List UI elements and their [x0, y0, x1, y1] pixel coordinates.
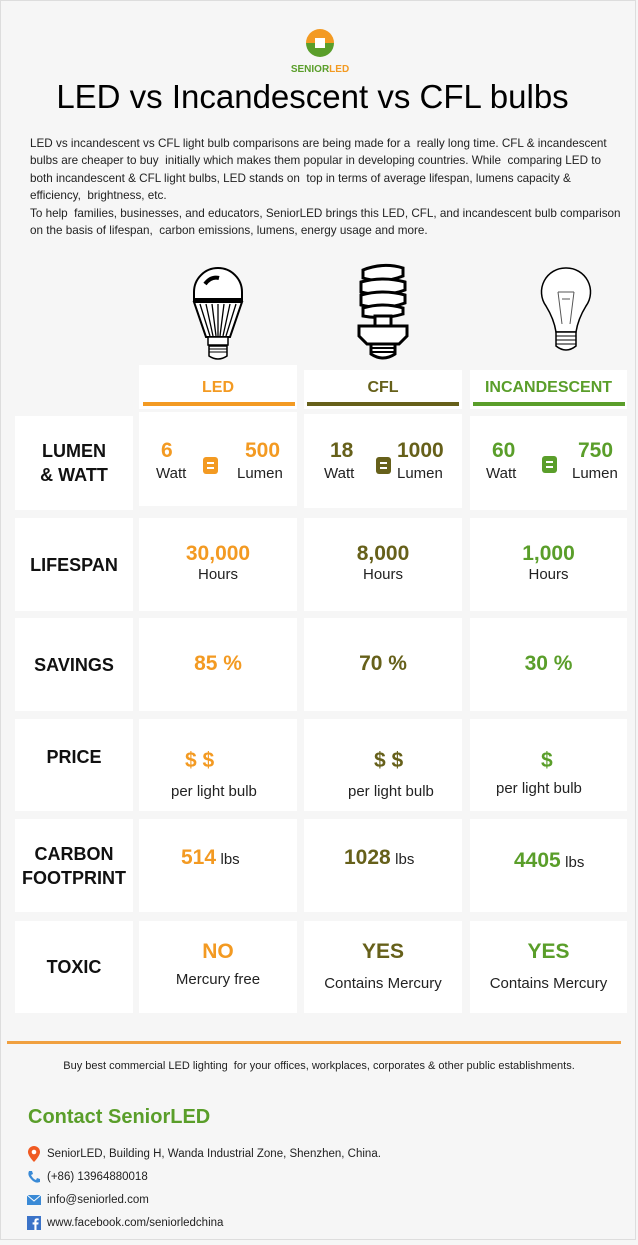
- header: LED: [139, 365, 297, 409]
- row: toxic: Contains Mercury: [324, 975, 442, 992]
- intro text: [30, 137, 621, 237]
- icon: location: SeniorLED, Building H, Wanda Industrial Zone, Shenzhen, China.: [47, 1148, 381, 1160]
- CFL lumen cell: Watt: [324, 465, 354, 482]
- icon: email: info@seniorled.com: [47, 1194, 149, 1206]
- intro text: LED vs incandescent vs CFL light bulb comparisons are being made for a really long time. CFL & incandescent bulbs are cheaper to buy initially which makes them popular in developing countries. While comparing LED to both incandescent & CFL light bulbs, LED stands on top in terms of average lifespan, lumens capacity & efficiency, brightness, etc.: [30, 137, 607, 202]
- row: lifespan: 30,000: [186, 542, 250, 565]
- row: lifespan: Hours: [198, 566, 238, 583]
- INC lumen cell: 60: [492, 439, 515, 462]
- INC lumen cell: Watt: [486, 465, 516, 482]
- LED lumen cell: [139, 412, 297, 506]
- title: LED vs Incandescent vs CFL bulbs: [56, 78, 569, 115]
- header: LED: LED: [202, 379, 234, 396]
- row: lifespan: 1,000: [522, 542, 575, 565]
- row: savings: 85 %: [194, 652, 242, 675]
- label: lumen & watt: & WATT: [40, 465, 108, 485]
- icon: LED bulb: [192, 267, 244, 360]
- LED lumen cell: 500: [245, 439, 280, 462]
- header: CFL: CFL: [367, 379, 399, 396]
- INC lumen cell: Lumen: [572, 465, 618, 482]
- LED lumen cell: 6: [161, 439, 173, 462]
- CFL lumen cell: 18: [330, 439, 353, 462]
- logo: [291, 29, 349, 75]
- row: lifespan: 8,000: [357, 542, 409, 565]
- row: carbon footprint: 4405 lbs: [514, 849, 584, 872]
- row: carbon footprint: [15, 819, 627, 912]
- tagline: Buy best commercial LED lighting for your offices, workplaces, corporates & other public establishments.: [63, 1060, 575, 1072]
- INC lumen cell: [470, 416, 627, 510]
- row: savings: SAVINGS: [34, 654, 114, 674]
- icon: CFL bulb: [358, 264, 408, 360]
- row: carbon footprint: FOOTPRINT: [22, 868, 126, 888]
- row: lifespan: [15, 518, 627, 611]
- CFL lumen cell: Lumen: [397, 465, 443, 482]
- row: lifespan: Hours: [363, 566, 403, 583]
- CFL lumen cell: [304, 414, 462, 508]
- row: savings: [15, 618, 627, 711]
- row: toxic: [15, 921, 627, 1013]
- header: CFL: [304, 370, 462, 409]
- row: price: per light bulb: [171, 783, 257, 800]
- icon: incandescent bulb: [540, 267, 592, 351]
- row: price: per light bulb: [496, 780, 582, 797]
- row: toxic: Mercury free: [176, 971, 260, 988]
- row: toxic: Contains Mercury: [490, 975, 607, 992]
- row: lifespan: Hours: [528, 566, 568, 583]
- CFL lumen cell: 1000: [397, 439, 444, 462]
- orange divider line: [7, 1041, 621, 1044]
- row: carbon footprint: 514 lbs: [181, 846, 240, 869]
- row: price: $ $: [185, 749, 214, 772]
- row: carbon footprint: CARBON: [34, 844, 114, 864]
- row: price: [15, 719, 627, 811]
- icon: phone: (+86) 13964880018: [47, 1170, 148, 1182]
- row: lumen & watt: [15, 412, 627, 510]
- label: lumen & watt: LUMEN: [42, 441, 106, 461]
- logo: SENIORLED: [291, 64, 349, 75]
- row: toxic: NO: [202, 940, 234, 963]
- row: carbon footprint: 1028 lbs: [344, 846, 414, 869]
- label: lumen & watt: [15, 416, 133, 510]
- row: price: $: [541, 749, 553, 772]
- row: toxic: TOXIC: [47, 957, 101, 977]
- row: savings: 70 %: [359, 652, 407, 675]
- row: savings: 30 %: [525, 652, 572, 675]
- contact heading: Contact SeniorLED: [28, 1106, 210, 1128]
- header: INCANDESCENT: INCANDESCENT: [485, 379, 612, 396]
- row: lifespan: LIFESPAN: [30, 554, 118, 574]
- header: INCANDESCENT: [470, 370, 627, 409]
- intro text: To help families, businesses, and educators, SeniorLED brings this LED, CFL, and incandescent bulb comparison on the basis of lifespan, carbon emissions, lumens, energy usage and more.: [30, 207, 621, 237]
- contact list: [27, 1146, 381, 1230]
- INC lumen cell: 750: [578, 439, 613, 462]
- row: price: $ $: [374, 749, 403, 772]
- LED lumen cell: Lumen: [237, 465, 283, 482]
- row: toxic: YES: [527, 940, 570, 963]
- row: price: per light bulb: [348, 783, 434, 800]
- row: price: PRICE: [46, 747, 102, 767]
- icon: facebook: www.facebook.com/seniorledchina: [47, 1216, 223, 1228]
- row: toxic: YES: [362, 940, 404, 963]
- LED lumen cell: Watt: [156, 465, 186, 482]
